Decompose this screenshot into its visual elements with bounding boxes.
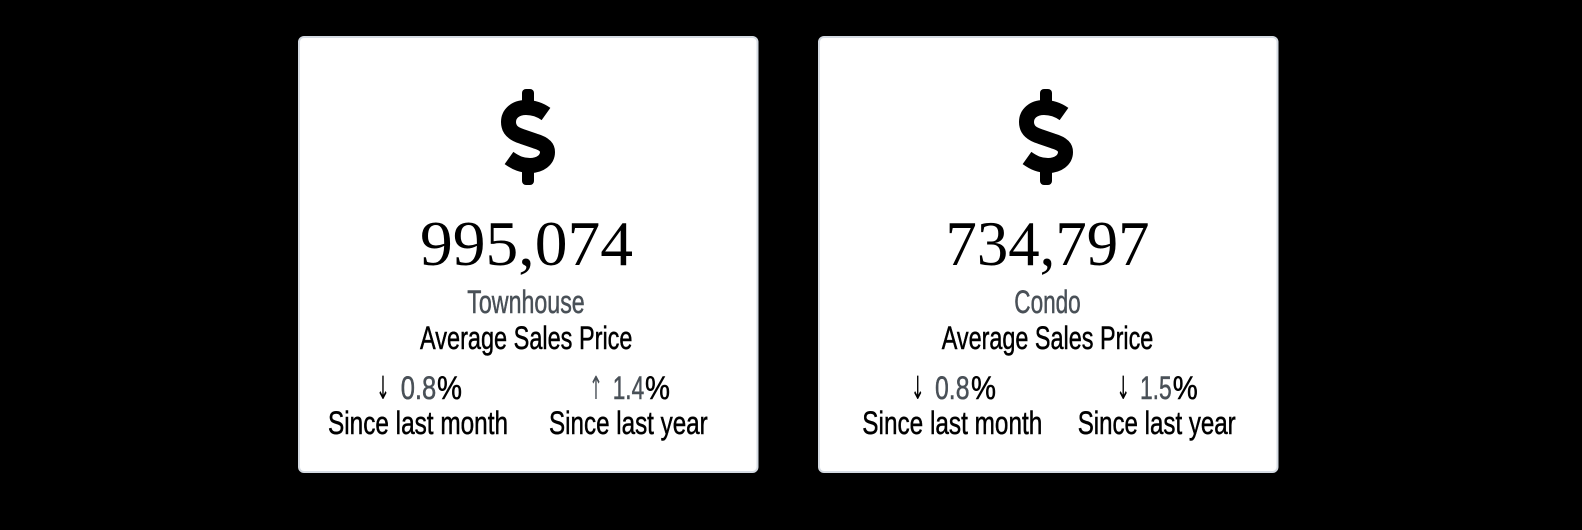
panel: condo — [819, 37, 1278, 472]
value: condo price: 734,797 — [946, 208, 1150, 279]
label: townhouse: Townhouse — [467, 284, 585, 320]
stat: since last month: % — [437, 370, 462, 406]
stat: since last year: 1.5 — [1140, 370, 1172, 406]
icon: dollar sign — [508, 89, 548, 185]
stat: since last month: % — [971, 370, 996, 406]
stat: since last year: 1.4 — [613, 370, 644, 406]
stat: since last month: 0.8 — [935, 370, 970, 406]
stat: since last year: % — [645, 370, 670, 406]
stat: since last year: Since last year — [1078, 405, 1236, 441]
label: average sales price: Average Sales Price — [942, 320, 1153, 356]
stat: since last month: 0.8 — [401, 370, 436, 406]
stat: since last month: ↓ — [376, 369, 390, 407]
stat: since last month — [862, 369, 1042, 441]
label: average sales price: Average Sales Price — [420, 320, 632, 356]
stat: since last year — [549, 369, 708, 441]
stat: since last month: Since last month — [862, 405, 1042, 441]
stat: since last month: Since last month — [328, 405, 508, 441]
value: townhouse price: 995,074 — [420, 208, 633, 279]
stat: since last year: ↑ — [589, 369, 603, 407]
stat: since last year: ↓ — [1116, 369, 1130, 407]
icon: dollar sign — [1026, 89, 1066, 185]
stat: since last month: ↓ — [911, 369, 925, 407]
stat: since last year: Since last year — [549, 405, 708, 441]
label: condo: Condo — [1014, 284, 1081, 320]
stat: since last year: % — [1173, 370, 1198, 406]
stat: since last month — [328, 369, 508, 441]
stat: since last year — [1078, 369, 1236, 441]
panel: townhouse — [299, 37, 758, 472]
